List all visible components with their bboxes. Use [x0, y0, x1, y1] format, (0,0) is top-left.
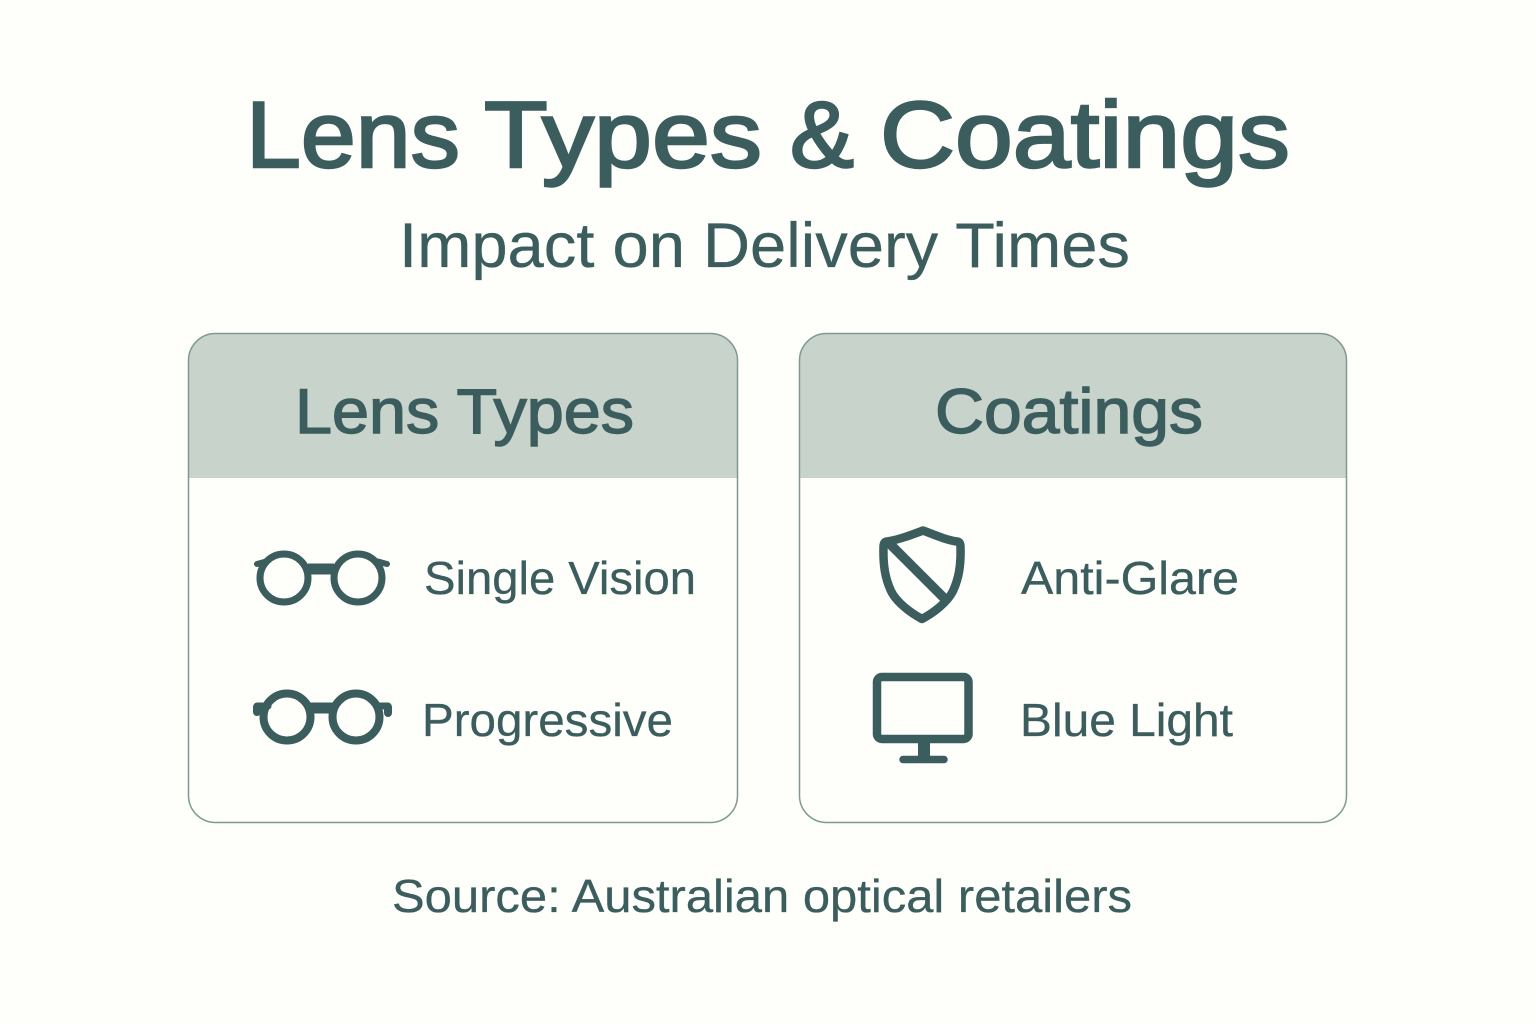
label: single vision: Single Vision: [424, 552, 696, 604]
label: blue light: Blue Light: [1020, 694, 1233, 746]
icon: shield: [883, 530, 961, 619]
title: [246, 82, 1290, 187]
panel: lens types: [188, 333, 738, 822]
heading: lens types: Lens Types: [295, 377, 634, 447]
icon: single vision glasses: [257, 554, 387, 602]
heading: coatings: Coatings: [935, 377, 1203, 447]
title: Types: [484, 82, 762, 187]
label: anti-glare: Anti-Glare: [1021, 552, 1239, 604]
icon: monitor: [877, 677, 968, 760]
source note: Source: Australian optical retailers: [392, 870, 1132, 922]
panel: coatings: [800, 333, 1347, 822]
icon: progressive glasses: [257, 694, 388, 740]
subtitle: Impact on Delivery Times: [399, 211, 1130, 281]
title: Lens: [246, 82, 460, 187]
title: &: [790, 82, 854, 187]
title: Coatings: [880, 82, 1290, 187]
label: progressive: Progressive: [422, 694, 673, 746]
